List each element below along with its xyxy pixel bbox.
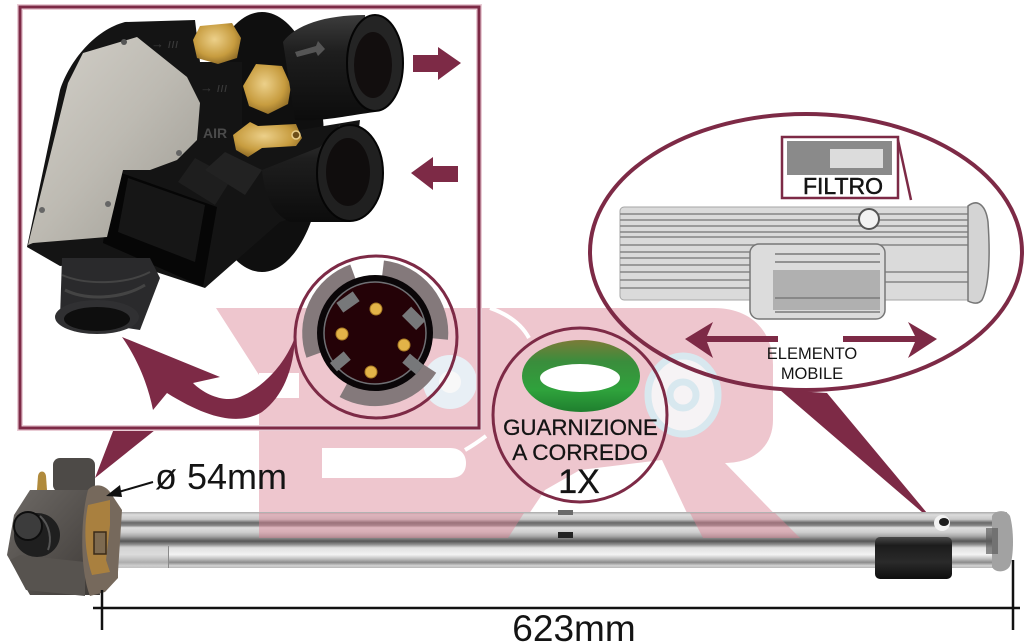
connector pins [336,303,410,378]
watermark: pink BR logo [216,308,800,545]
photo: round plug socket [55,258,160,334]
photo: black head unit: AIR [203,125,227,141]
head: brass pin [37,472,47,490]
label: seal included: 1X [558,463,600,501]
label: moving element: ELEMENTO [767,345,857,363]
label: seal included [503,415,658,501]
label: seal included: A CORREDO [512,440,648,465]
photo: black head unit [27,12,360,288]
tube end cap [992,511,1013,571]
watermark: pale blue round logo [648,356,718,434]
photo: sensor head [7,458,122,596]
callout: connector pin detail [295,256,457,418]
head: block [7,490,100,595]
dimension label: diameter 54mm: ø 54mm [155,456,287,497]
watermark overlay on tube [259,513,800,538]
moving black sleeve [875,537,952,579]
head: electrical connector [14,512,60,557]
callout: supplied O-ring [493,328,667,502]
pointer: from frame to sensor head [95,426,160,478]
arrow: curved from connector to socket [122,337,295,419]
photo: brass plugs and nozzle [193,23,302,157]
head: top cylinder [53,458,95,492]
arrow: movement left [685,322,778,358]
head: brown flange [82,485,122,596]
tube hole [934,515,950,531]
photo: upper outlet tube [283,15,403,120]
photo: black head unit: → ııı [151,36,179,51]
arrow: flow in [411,157,458,190]
panel: head detail frame [20,7,479,428]
label: seal included: GUARNIZIONE [503,415,658,440]
watermark: pale blue gear [423,355,477,409]
label: moving element: MOBILE [781,365,843,383]
tube centre notches [558,510,573,538]
arrow: flow out [413,47,461,80]
callout: moving element ellipse [590,114,1022,390]
filter inset box [782,137,911,200]
filter inset box: FILTRO [803,173,883,199]
photo: black head unit: → ııı [200,80,228,95]
arrow: movement right [843,322,937,358]
pointer: from filter callout to tube hole [780,390,937,525]
photo: sensor tube [112,510,1013,579]
label: moving element [767,345,857,383]
drawing: filter tube [620,203,989,319]
icon: green O-ring [522,340,640,412]
photo: lower inlet tube [262,125,383,222]
